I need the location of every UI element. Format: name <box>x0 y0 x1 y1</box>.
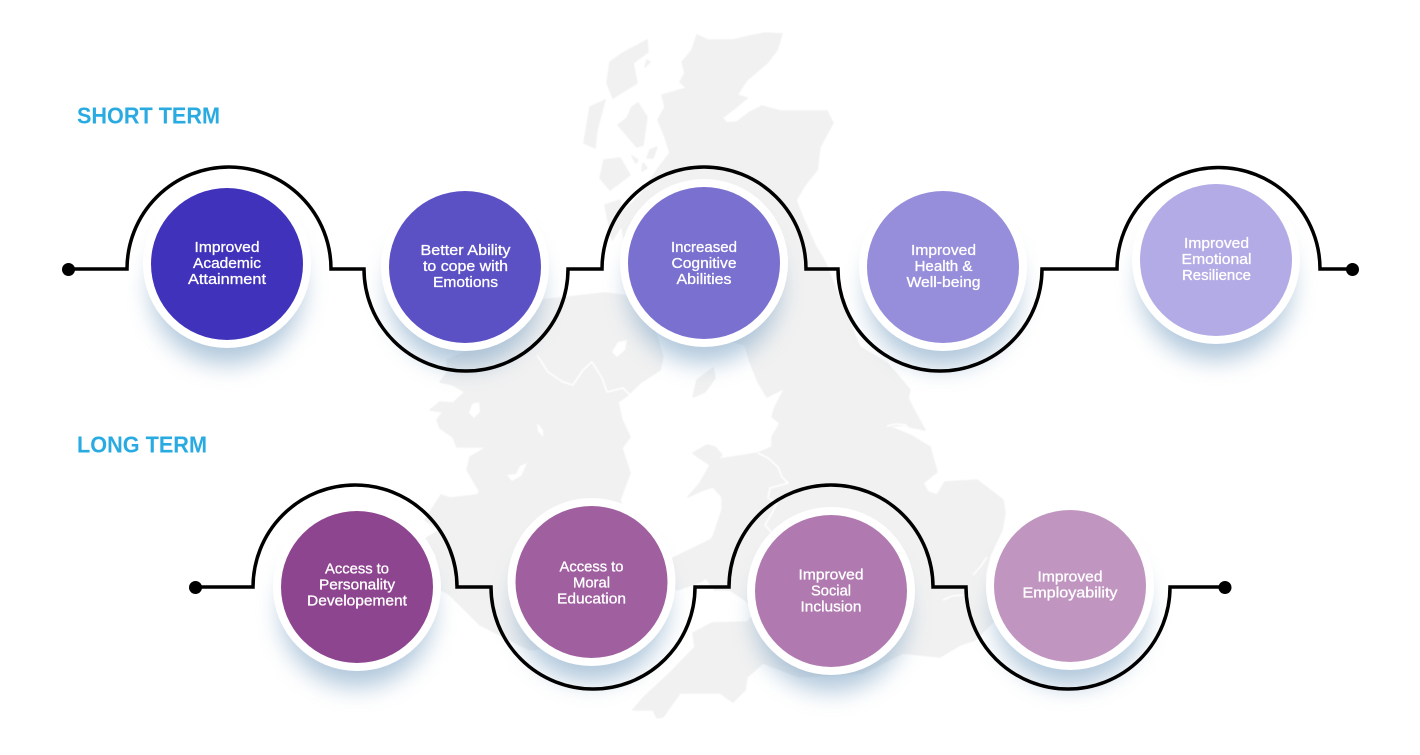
line end dot <box>1346 263 1359 276</box>
circle: Access to Moral Education: Access to <box>560 558 624 576</box>
map: Great Britain mainland <box>620 33 1005 718</box>
circle: Improved Academic Attainment: Academic <box>193 255 262 272</box>
circle: Access to Moral Education: Education <box>557 590 626 608</box>
map: Isle of Man and Anglesey <box>693 368 722 465</box>
circle: Improved Social Inclusion <box>747 507 915 675</box>
circle: Better Ability to cope with Emotions: to cope with <box>423 258 508 275</box>
heading: short term: SHORT TERM <box>77 102 220 128</box>
circle: Improved Academic Attainment: Improved <box>194 239 260 256</box>
circle: Better Ability to cope with Emotions: Emotions <box>433 274 498 291</box>
circle: Better Ability to cope with Emotions: Better Ability <box>420 242 511 259</box>
background map of the UK and Ireland <box>415 33 1005 718</box>
circle: Improved Social Inclusion: Social <box>811 582 851 600</box>
circle: Improved Social Inclusion: Inclusion <box>800 598 862 616</box>
circle: Improved Health and Well-being <box>859 183 1027 351</box>
circle: Increased Cognitive Abilities: Cognitive <box>672 255 736 272</box>
circle: Access to Personality Developement: Personality <box>319 576 396 594</box>
circle: Access to Personality Developement: Developement <box>307 592 408 610</box>
circle: Improved Emotional Resilience: Emotional <box>1182 251 1252 268</box>
line start dot <box>62 263 75 276</box>
circle: Improved Emotional Resilience: Resilience <box>1182 267 1251 284</box>
circle: Increased Cognitive Abilities: Increased <box>671 239 737 256</box>
timeline: short term <box>62 167 1359 371</box>
circle: Access to Moral Education <box>508 498 676 666</box>
circle: Improved Employability <box>986 502 1154 670</box>
connector line: short term <box>68 167 1352 371</box>
circle: Increased Cognitive Abilities <box>620 179 788 347</box>
circle: Access to Moral Education: Moral <box>573 574 610 592</box>
circle: Increased Cognitive Abilities: Abilities <box>676 271 732 288</box>
circle shadows: short term <box>151 208 1292 367</box>
circle: Access to Personality Developement: Access to <box>325 560 389 578</box>
circle: Improved Emotional Resilience: Improved <box>1184 235 1249 252</box>
circle: Improved Academic Attainment <box>143 180 311 348</box>
circle: Improved Health and Well-being: Health & <box>914 258 972 275</box>
line end dot <box>1218 581 1232 594</box>
circle: Improved Emotional Resilience <box>1132 176 1300 344</box>
circle: Improved Employability: Improved <box>1038 568 1102 586</box>
map: Ireland <box>415 293 663 650</box>
map: loughs and rivers <box>469 340 987 600</box>
connector line: long term <box>195 485 1225 689</box>
heading: long term: LONG TERM <box>77 432 207 458</box>
circle: Improved Academic Attainment: Attainment <box>188 271 267 288</box>
map: Scottish islands <box>584 40 657 240</box>
circle shadows: long term <box>281 530 1146 691</box>
circle: Improved Health and Well-being: Well-being <box>906 274 980 291</box>
timeline: long term <box>189 485 1232 691</box>
circle: Improved Social Inclusion: Improved <box>798 566 864 584</box>
line start dot <box>189 581 202 594</box>
circle: Access to Personality Developement <box>273 503 441 671</box>
circle: Better Ability to cope with Emotions <box>381 183 549 351</box>
circle: Improved Employability: Employability <box>1022 584 1118 602</box>
circle: Improved Health and Well-being: Improved <box>911 242 976 259</box>
